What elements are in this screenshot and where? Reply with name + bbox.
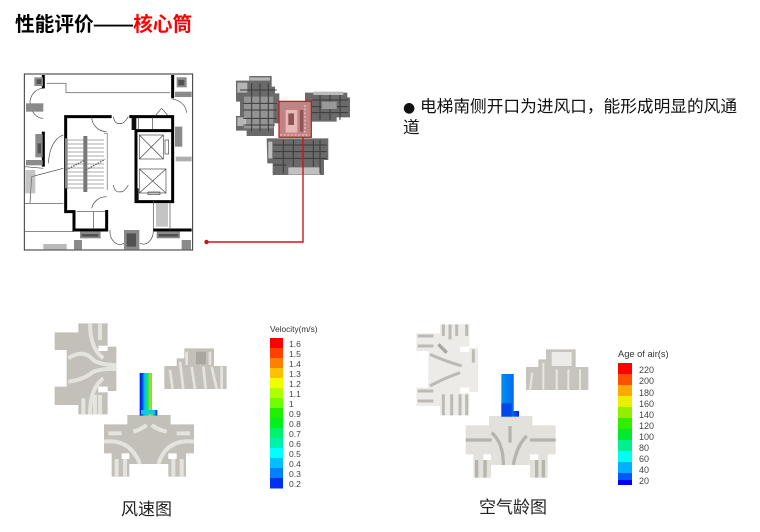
air age legend: 160	[639, 399, 654, 409]
right block	[164, 348, 227, 389]
velocity legend	[270, 324, 318, 489]
velocity legend: 0.2	[289, 479, 301, 489]
velocity legend: 1.4	[289, 359, 301, 369]
core air age contour	[501, 374, 519, 417]
bottom block	[466, 416, 556, 478]
caption: velocity map: 风速图	[121, 500, 172, 519]
air age legend: 100	[639, 432, 654, 442]
air age legend: 40	[639, 465, 649, 475]
velocity legend: 1	[289, 399, 294, 409]
stairs	[67, 140, 104, 188]
velocity plan	[55, 323, 227, 477]
velocity legend: 1.5	[289, 349, 301, 359]
velocity legend: 1.1	[289, 389, 301, 399]
velocity legend: 1.2	[289, 379, 301, 389]
velocity legend: 1.3	[289, 369, 301, 379]
air age legend: 120	[639, 421, 654, 431]
caption: air age map: 空气龄图	[479, 498, 547, 517]
stair and lift core walls	[43, 75, 192, 230]
right tower	[305, 93, 350, 122]
velocity legend: Velocity(m/s)	[270, 324, 318, 334]
site plan thumbnail	[236, 76, 350, 175]
highlighted core	[279, 101, 311, 137]
velocity legend: 0.4	[289, 459, 301, 469]
air age plan	[416, 324, 588, 478]
left block	[416, 324, 478, 415]
air age legend: 80	[639, 443, 649, 453]
left tower	[236, 76, 279, 136]
air age legend: 180	[639, 388, 654, 398]
velocity legend: 0.8	[289, 419, 301, 429]
air age legend: Age of air(s)	[618, 349, 669, 359]
velocity legend: 0.6	[289, 439, 301, 449]
velocity legend: 1.6	[289, 339, 301, 349]
bullet text block: ●	[403, 100, 415, 116]
washroom fixtures	[25, 77, 192, 249]
air age legend	[618, 349, 669, 486]
bullet text block	[403, 97, 737, 137]
velocity legend: 0.7	[289, 429, 301, 439]
bullet text block: 电梯南侧开口为进风口，能形成明显的风通	[420, 97, 737, 116]
velocity legend: 0.9	[289, 409, 301, 419]
right block	[526, 349, 588, 390]
title: 性能评价——核心筒	[15, 14, 192, 36]
velocity legend: 0.3	[289, 469, 301, 479]
air age legend: 20	[639, 476, 649, 486]
red leader line	[204, 137, 303, 244]
air age legend: 60	[639, 454, 649, 464]
left block	[55, 323, 116, 414]
air age legend: 140	[639, 410, 654, 420]
bullet text block: 道	[403, 118, 420, 137]
corridors and doors	[47, 83, 170, 93]
core velocity contour	[140, 373, 157, 416]
floor plan of core	[24, 74, 193, 250]
bottom block	[104, 415, 194, 477]
bottom tower	[267, 138, 328, 175]
velocity legend: 0.5	[289, 449, 301, 459]
air age legend: 200	[639, 376, 654, 386]
air age legend: 220	[639, 365, 654, 375]
